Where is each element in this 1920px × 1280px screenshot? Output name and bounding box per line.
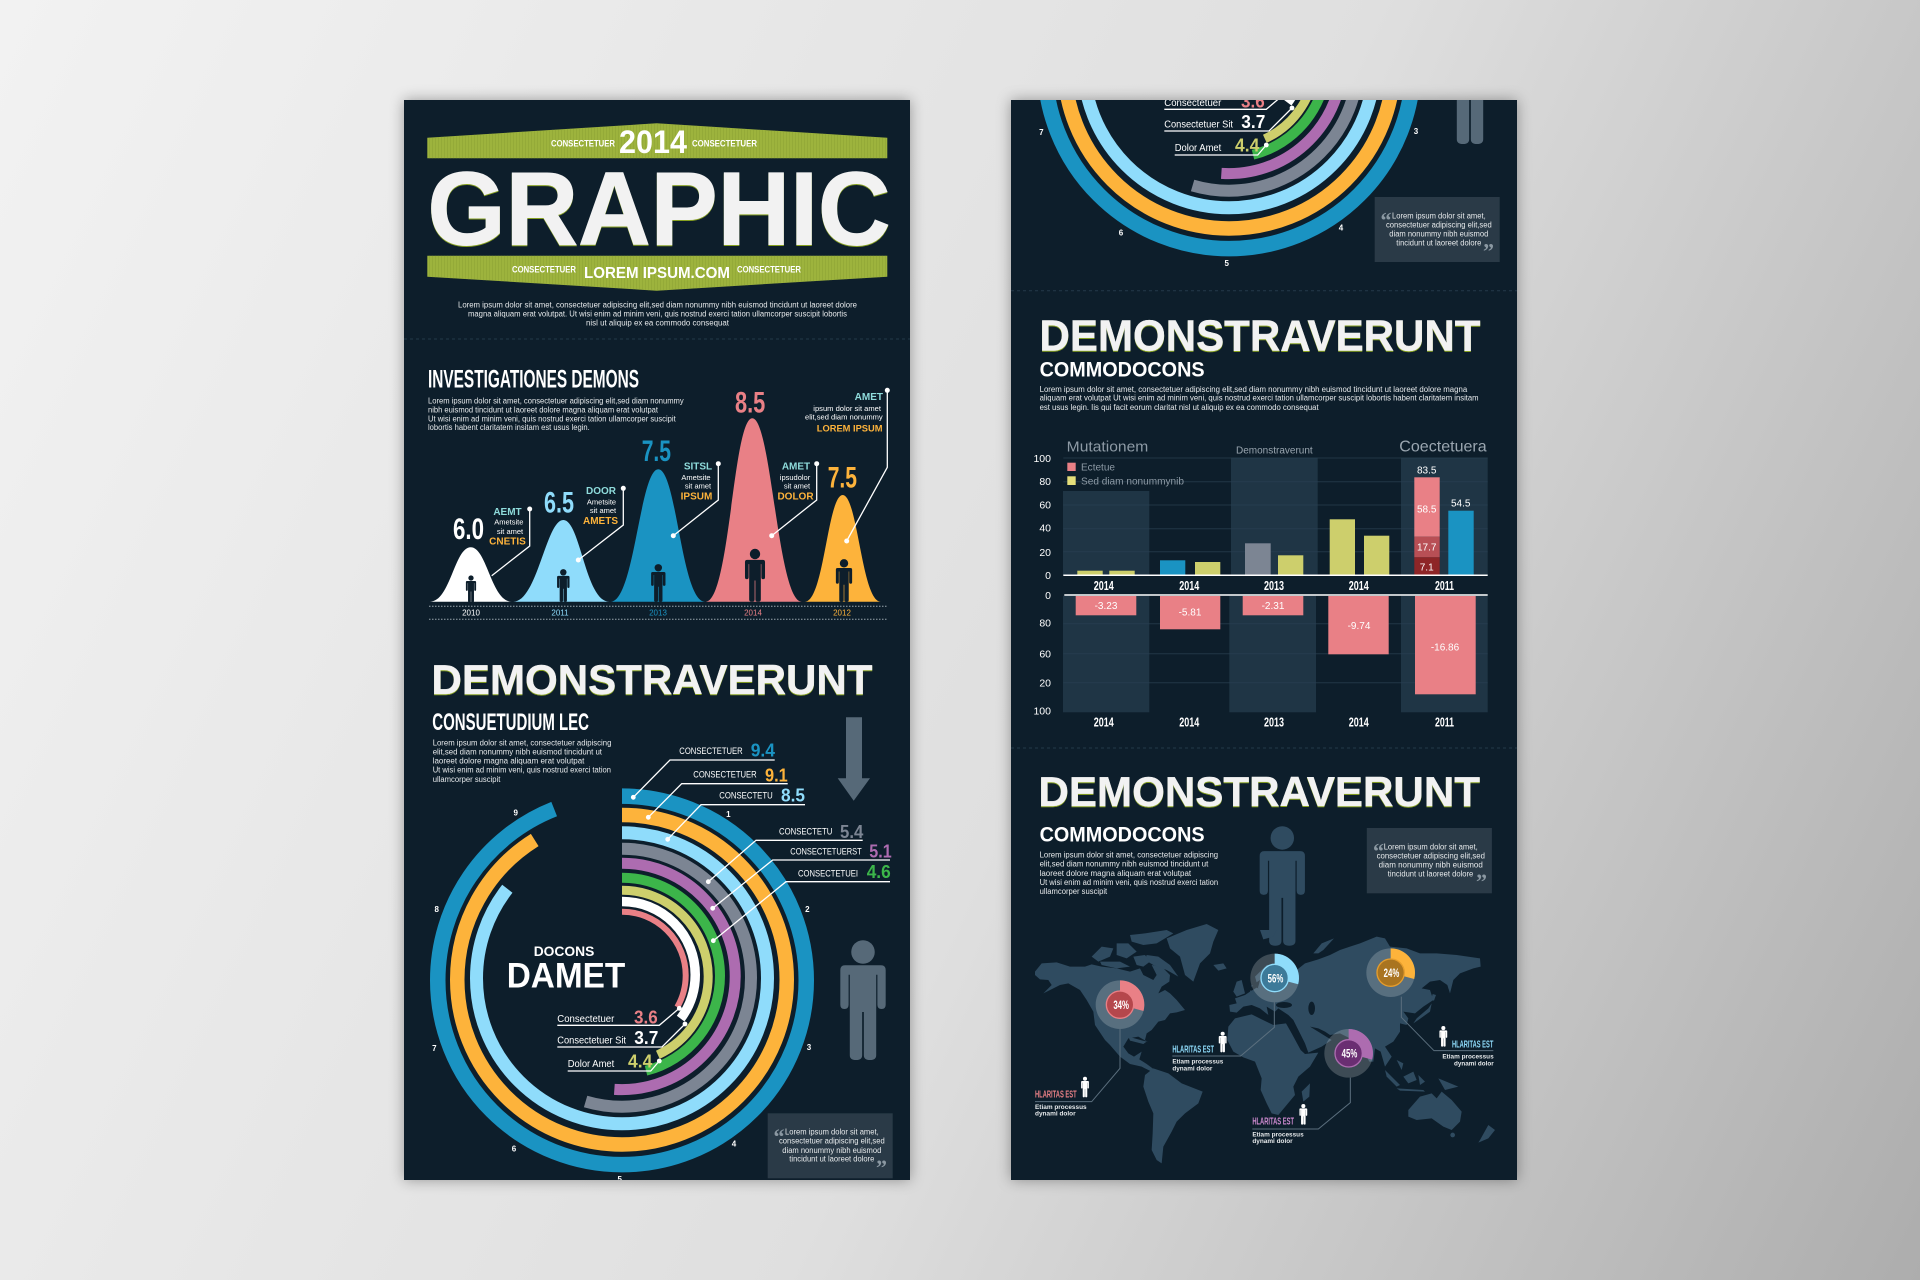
label: purple: HLARITAS EST [1252,1117,1294,1128]
donut: 24% [1366,948,1415,997]
bar chart [1033,438,1488,730]
axis years: 2011 [551,609,569,618]
radial chart continuation [1039,100,1418,266]
ring numbers: 2 [805,905,810,914]
quote box bottom: Lorem ipsum dolor sit amet, [1384,843,1478,852]
outer value labels: 8.5 [781,785,805,805]
bell: 2010: AEMT [493,507,522,518]
label: coral: HLARITAS EST [1035,1089,1077,1100]
axis years: 2014 [744,609,762,618]
axis years: 2012 [833,609,851,618]
inner value labels: Consectetuer [557,1014,615,1025]
y axis labels: 60 [1039,649,1051,661]
bell: 2012: LOREM IPSUM [817,424,883,435]
y axis labels: 100 [1033,706,1051,718]
year labels: 2013 [1264,715,1284,730]
bottom banner [427,256,887,291]
lower bars: -16.86 [1431,643,1460,654]
inner value labels: Consectetuer Sit [1164,120,1233,131]
ring numbers: 1 [726,810,731,819]
bell: 2011 [513,486,626,602]
year labels: 2014 [1179,578,1200,593]
upper bars [1077,465,1474,575]
inner value labels: Consectetuer Sit [557,1036,626,1047]
text: commodocons paragraph: Lorem ipsum dolor sit amet, consectetuer adipiscing elit,sed diam nonummy nibh euismod tincidunt ut laoreet dolore magna [1040,385,1468,394]
text: map paragraph: elit,sed diam nonummy nibh euismod tincidunt ut [1040,860,1209,869]
column backgrounds [1063,458,1488,712]
ring numbers: 5 [617,1175,622,1184]
bell: 2011: Ametsite [587,497,616,506]
bell: 2013: sit amet [685,482,712,491]
lower bars: -9.74 [1348,621,1371,632]
heading: investigationes demons: INVESTIGATIONES DEMONS [428,365,639,393]
legend: Sed diam nonummynib [1081,475,1184,487]
label: purple: Etiam processus [1252,1131,1304,1138]
lower bars: -2.31 [1262,601,1285,612]
bell: 2010: Ametsite [494,518,523,527]
title: GRAPHIC: GRAPHIC [428,152,890,268]
ring numbers: 3 [807,1043,812,1052]
inner value labels: 4.4 [1235,135,1259,155]
icon: person legs [1456,100,1484,144]
outer value labels [631,741,892,943]
y axis labels: 20 [1039,678,1051,690]
year labels: 2014 [1349,715,1369,730]
label: orange: dynami dolor [1454,1060,1494,1067]
label: blue: Etiam processus [1172,1059,1224,1066]
inner value labels [557,1006,687,1071]
icon: large person [1260,826,1305,946]
bottom banner: CONSECTETUER [512,265,576,276]
quote box: tincidunt ut laoreet dolore [789,1155,875,1164]
upper bars: 54.5 [1451,499,1471,510]
intro text: magna aliquam erat volutpat. Ut wisi enim ad minim veni, quis nostrud exerci tation ullamcorper suscipit lobortis [468,310,847,318]
year labels: 2013 [1264,578,1284,593]
bell: 2014 [706,387,819,602]
label: orange: Etiam processus [1442,1054,1494,1061]
ring numbers: 7 [432,1044,437,1053]
quote box: “ [774,1124,784,1149]
upper bars: 58.5 [1417,505,1437,516]
quote box: diam nonummy nibh euismod [782,1146,881,1155]
text: investigationes paragraph [428,396,684,432]
upper bars: 17.7 [1417,542,1437,553]
quote box top: tincidunt ut laoreet dolore [1396,238,1482,247]
intro text: Lorem ipsum dolor sit amet, consectetuer adipiscing elit,sed diam nonummy nibh euismod tincidunt ut laoreet dolore [458,301,858,310]
outer value labels: 5.1 [869,841,892,861]
chart headings: Mutationem [1067,438,1148,455]
inner value labels: 3.7 [1241,112,1265,132]
inner value labels: 3.6 [634,1007,658,1027]
intro text [458,301,858,328]
y axis labels: 80 [1039,476,1051,488]
text: commodocons paragraph [1040,385,1479,412]
y axis labels: 100 [1033,453,1051,465]
label: coral: Etiam processus [1035,1104,1087,1111]
icon: gray person [840,940,886,1060]
quote box bottom: ” [1476,869,1487,894]
outer value labels: 9.4 [751,741,775,761]
text: map paragraph: Lorem ipsum dolor sit amet, consectetuer adipiscing [1040,851,1218,860]
quote box: Lorem ipsum dolor sit amet, [785,1128,879,1137]
bell: 2014: DOLOR [777,492,814,503]
text: consuetudium paragraph: Lorem ipsum dolor sit amet, consectetuer adipiscing [433,739,611,748]
bell: 2011: 6.5 [544,487,574,520]
ring numbers: 4 [1339,224,1344,232]
y axis labels: 80 [1039,618,1051,630]
panel: left poster [404,100,910,1184]
bell: 2012: AMET [855,392,883,403]
label: coral: dynami dolor [1035,1111,1076,1118]
outer value labels: CONSECTETUER [679,746,743,756]
upper bars: 7.1 [1420,562,1434,573]
quote box top: diam nonummy nibh euismod [1389,230,1488,239]
quote box: consectetuer adipiscing elit,sed [779,1137,885,1146]
quote box bottom [1367,828,1492,894]
world map [1035,924,1495,1163]
text: commodocons paragraph: aliquam erat volutpat Ut wisi enim ad minim veni, quis nostrud exerci tation ullamcorper suscipit lobortis habent claritatem insitam [1040,394,1479,403]
bell: 2010: sit amet [497,527,524,536]
lower bars [1076,596,1476,694]
quote box top: ” [1483,239,1494,264]
subheading: commodocons: COMMODOCONS [1040,359,1205,382]
year labels [1094,578,1454,730]
donut: 45%: 45% [1342,1047,1358,1061]
label: orange: HLARITAS EST [1452,1039,1494,1050]
lower bars: -5.81 [1179,608,1202,619]
text: map paragraph [1040,851,1218,896]
label: blue: dynami dolor [1172,1065,1213,1072]
heading: demonstraverunt 2: DEMONSTRAVERUNT [1040,312,1481,361]
label: blue [1172,1032,1227,1072]
top banner: CONSECTETUER [692,138,757,150]
top banner [427,123,887,160]
bell: 2010: CNETIS [489,537,526,548]
donut: 45% [1324,1029,1373,1078]
quote box bottom: tincidunt ut laoreet dolore [1388,870,1474,879]
lower bars: -3.23 [1095,601,1118,612]
quote box [768,1113,893,1180]
y axis labels: 0 [1045,590,1051,602]
inner value labels: 3.6 [1241,91,1265,111]
bell: 2010: 6.0 [453,513,484,546]
top banner: 2014 [619,124,687,160]
connector lines [1035,997,1493,1129]
chart headings: Demonstraverunt [1236,445,1313,456]
text: investigationes paragraph: Lorem ipsum dolor sit amet, consectetuer adipiscing elit,sed diam nonummy [428,396,684,405]
year labels: 2014 [1094,578,1114,593]
bell: 2012: 7.5 [828,462,857,495]
bottom banner: CONSECTETUER [737,265,801,276]
inner value labels [1164,100,1294,156]
radial chart [432,741,892,1184]
upper bars: 83.5 [1417,465,1437,476]
center title [508,946,625,988]
top banner: CONSECTETUER [551,138,615,150]
inner value labels: Consectetuer [1164,98,1222,109]
text: consuetudium paragraph: elit,sed diam nonummy nibh euismod tincidunt ut [433,748,603,757]
donut: 34% [1096,980,1144,1029]
bell: 2010 [430,506,532,602]
label: blue: HLARITAS EST [1172,1044,1214,1055]
quote box: ” [876,1155,887,1180]
bell: 2014: AMET [782,461,810,472]
quote box top: “ [1380,208,1392,233]
inner value labels: Dolor Amet [1175,143,1222,154]
center title: DAMET [507,956,625,995]
inner value labels: 4.4 [628,1051,652,1071]
outer value labels: CONSECTETUERST [790,847,862,857]
year labels: 2014 [1179,715,1200,730]
bottom banner: LOREM IPSUM.COM [584,265,730,282]
text: commodocons paragraph: est usus legin. Iis qui facit eorum claritat nisl ut aliquip ex ea commodo consequat [1040,403,1319,412]
ring numbers: 8 [434,905,439,914]
text: map paragraph: laoreet dolore magna aliquam erat volutpat [1040,869,1192,878]
ring numbers: 6 [1119,228,1124,238]
ring numbers: 4 [732,1140,737,1148]
outer value labels: 4.6 [867,862,891,882]
label: orange [1439,1026,1494,1067]
intro text: nisl ut aliquip ex ea commodo consequat [586,319,730,328]
bell: 2013: 7.5 [642,435,671,468]
outer value labels: CONSECTETU [719,790,773,800]
outer value labels: CONSECTETUER [693,769,757,779]
axis years [429,606,887,619]
ring numbers [432,808,812,1184]
quote box bottom: consectetuer adipiscing elit,sed [1377,851,1485,860]
donut: 56% [1250,954,1299,1002]
bell: 2012: ipsum dolor sit amet [813,404,882,413]
bell: 2011: AMETS [583,516,618,527]
year labels: 2014 [1349,578,1369,593]
quote box top [1375,197,1500,264]
quote box top: Lorem ipsum dolor sit amet, [1392,211,1486,220]
donut: 34%: 34% [1113,998,1129,1012]
quote box bottom: “ [1373,838,1384,864]
year labels: 2014 [1094,715,1114,730]
outer value labels: 9.1 [765,765,788,785]
legend: Ectetue [1081,462,1115,474]
chart headings [1067,438,1487,456]
ring numbers: 7 [1039,128,1044,137]
quote box top: consectetuer adipiscing elit,sed [1386,220,1492,229]
y axis labels: 60 [1039,500,1051,512]
donut: 56%: 56% [1268,971,1284,985]
text: consuetudium paragraph: Ut wisi enim ad minim veni, quis nostrud exerci tation [433,766,611,775]
outer value labels: 5.4 [840,822,863,842]
bell: 2011: sit amet [590,506,617,515]
axis years: 2013 [649,609,667,618]
text: map paragraph: Ut wisi enim ad minim veni, quis nostrud exerci tation [1040,878,1218,887]
bell: 2013: Ametsite [681,473,711,482]
y axis labels: 40 [1039,522,1051,534]
outer value labels: CONSECTETUEI [798,868,858,878]
inner value labels: 3.7 [634,1028,658,1048]
bell chart [429,387,890,619]
year labels: 2011 [1435,578,1454,593]
label: purple [1252,1104,1307,1145]
bell: 2014: ipsudolor [780,473,811,482]
label: coral [1035,1077,1089,1118]
subheading: consuetudium lec: CONSUETUDIUM LEC [432,709,589,736]
bell: 2012: elit,sed diam nonummy [805,413,883,422]
text: investigationes paragraph: nibh euismod tincidunt ut laoreet dolore magna aliquam erat volutpat [428,405,659,414]
donut: 24%: 24% [1384,966,1400,980]
chart headings: Coectetuera [1399,438,1487,455]
panel: right poster [1011,0,1517,1180]
inner value labels: Dolor Amet [568,1059,615,1070]
ring numbers: 6 [512,1144,517,1154]
y axis labels [1033,453,1051,718]
bell: 2013 [611,435,721,602]
label: purple: dynami dolor [1252,1138,1293,1145]
text: consuetudium paragraph: ullamcorper suscipit [433,775,501,784]
arrow: down [838,717,870,801]
text: consuetudium paragraph [433,739,611,784]
center title: DOCONS [534,943,594,959]
bell: 2014: 8.5 [735,387,765,420]
bell: 2013: SITSL [684,461,712,472]
text: consuetudium paragraph: laoreet dolore magna aliquam erat volutpat [433,757,585,766]
ring numbers [1039,127,1419,268]
heading: demonstraverunt 1: DEMONSTRAVERUNT [432,656,873,703]
bell: 2012 [805,388,890,602]
y axis labels: 20 [1039,547,1051,559]
text: map paragraph: ullamcorper suscipit [1040,887,1108,896]
ring numbers: 9 [513,808,518,818]
ring numbers: 3 [1414,127,1419,136]
axis years: 2010 [462,609,480,618]
heading: demonstraverunt 3: DEMONSTRAVERUNT [1038,768,1480,815]
bell: 2013: IPSUM [681,492,712,503]
bell: 2011: DOOR [586,486,617,497]
legend [1067,462,1184,487]
outer value labels: CONSECTETU [779,827,832,837]
bell: 2014: sit amet [784,482,811,491]
text: investigationes paragraph: Ut wisi enim ad minim veni, quis nostrud exerci tation ullamcorper suscipit [428,414,676,423]
subheading: commodocons 2: COMMODOCONS [1040,824,1205,847]
text: investigationes paragraph: lobortis habent claritatem insitam est usus legin. [428,423,590,432]
quote box bottom: diam nonummy nibh euismod [1379,861,1483,870]
ring numbers: 5 [1224,259,1229,268]
map landmasses [1035,924,1495,1163]
year labels: 2011 [1435,715,1454,730]
y axis labels: 0 [1045,570,1051,582]
